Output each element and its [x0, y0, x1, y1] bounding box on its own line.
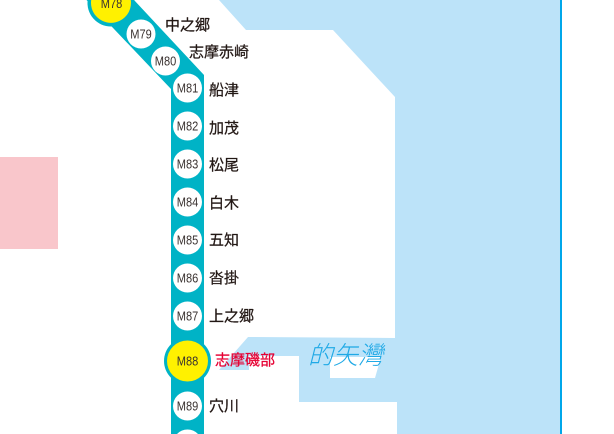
label: 志摩赤崎: 志摩赤崎 — [189, 44, 249, 61]
station M79 — [126, 20, 156, 48]
pink area block — [0, 157, 58, 249]
label: 加茂: 加茂 — [209, 120, 239, 137]
station M86 — [173, 264, 202, 292]
station M79: M79 — [130, 28, 152, 42]
station M87 — [173, 302, 202, 330]
station M82 — [173, 112, 202, 140]
station M81 — [173, 74, 202, 102]
station M81: M81 — [177, 82, 198, 96]
station M83: M83 — [177, 158, 198, 172]
station M88 — [164, 338, 211, 384]
station M80 — [151, 46, 180, 76]
label: 穴川: 穴川 — [209, 398, 239, 415]
station M85 — [173, 226, 202, 254]
water: sea and bay — [219, 0, 560, 434]
label: 中之郷: 中之郷 — [165, 17, 210, 34]
station M80: M80 — [155, 55, 176, 69]
station M89 — [173, 392, 202, 420]
station M89: M89 — [177, 400, 198, 414]
station M78 — [87, 0, 134, 27]
station M88: M88 — [177, 355, 198, 369]
station M87: M87 — [177, 310, 198, 324]
island in bay — [330, 357, 381, 378]
label: 五知: 五知 — [209, 232, 239, 249]
label: 船津: 船津 — [209, 82, 239, 99]
label: 松尾: 松尾 — [209, 157, 239, 174]
railway line band — [86, 0, 204, 434]
station M85: M85 — [177, 234, 198, 248]
coast line right edge — [560, 0, 562, 434]
label: 沓掛: 沓掛 — [209, 270, 239, 287]
label: 白木: 白木 — [209, 195, 239, 212]
station M86: M86 — [177, 272, 198, 286]
label: 上之郷: 上之郷 — [209, 308, 254, 325]
station M83 — [173, 150, 202, 178]
label: 志摩磯部: 志摩磯部 — [215, 352, 275, 369]
bay name: 的矢灣 — [307, 342, 388, 370]
station M84: M84 — [177, 196, 198, 210]
next station circle — [177, 429, 198, 434]
station M82: M82 — [177, 120, 198, 134]
station M84 — [173, 188, 202, 216]
